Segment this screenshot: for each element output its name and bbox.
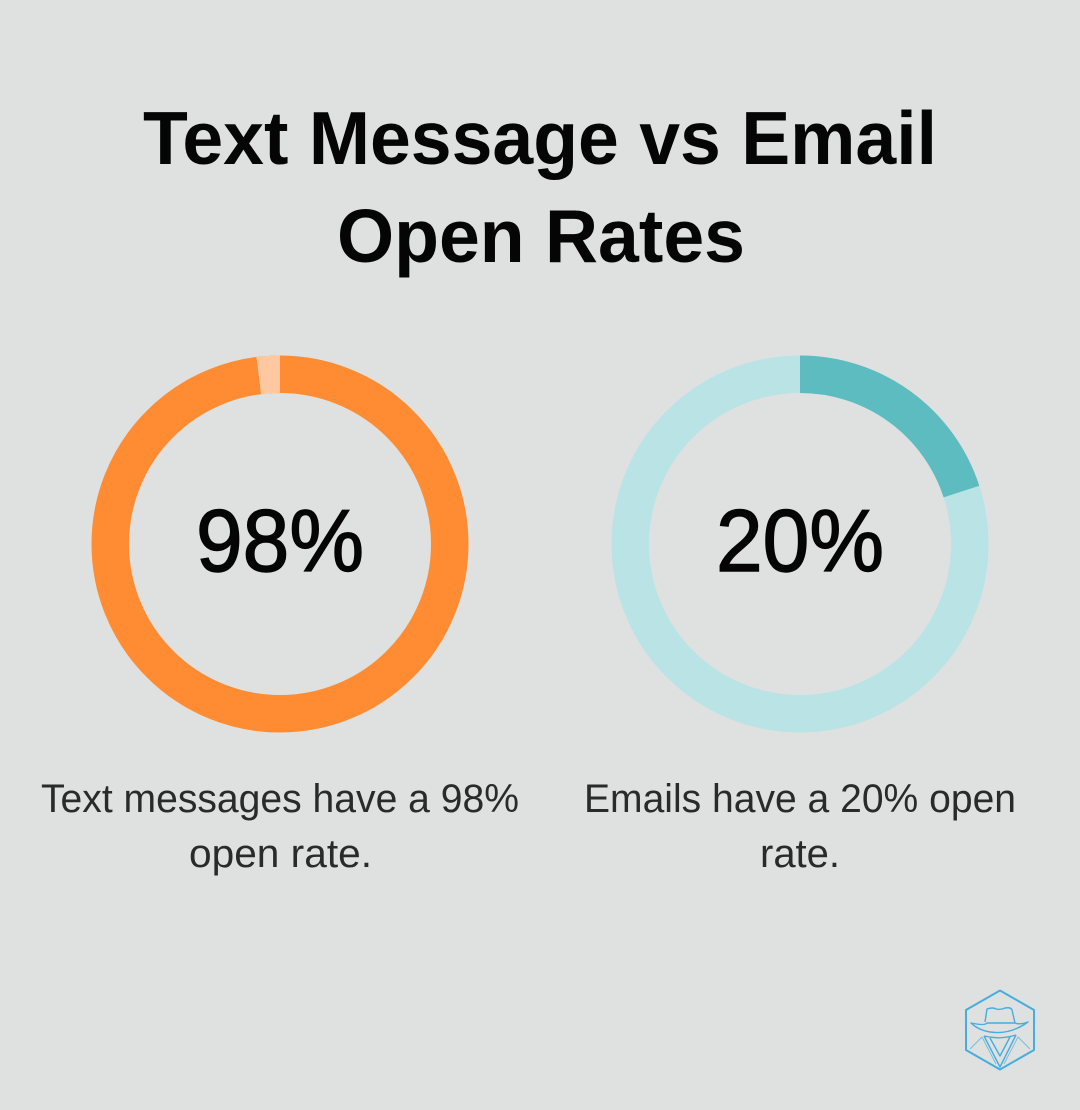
title: Text Message vs Email	[143, 96, 937, 180]
value: 98%: 98%	[196, 491, 364, 590]
title	[143, 96, 937, 278]
description: emails: Emails have a 20% open	[584, 777, 1016, 821]
panel: text messages	[41, 374, 519, 876]
description: text messages: open rate.	[189, 832, 372, 876]
description: text messages: Text messages have a 98%	[41, 777, 519, 821]
panel: emails	[584, 374, 1016, 876]
description: emails	[584, 777, 1016, 876]
donut chart: 98%	[110, 374, 450, 714]
description: text messages	[41, 777, 519, 876]
value: 20%: 20%	[716, 491, 884, 590]
title: Open Rates	[337, 194, 745, 278]
icon: hexagon spy logo	[966, 990, 1034, 1070]
donut chart: 20%	[630, 374, 970, 714]
description: emails: rate.	[760, 832, 840, 876]
